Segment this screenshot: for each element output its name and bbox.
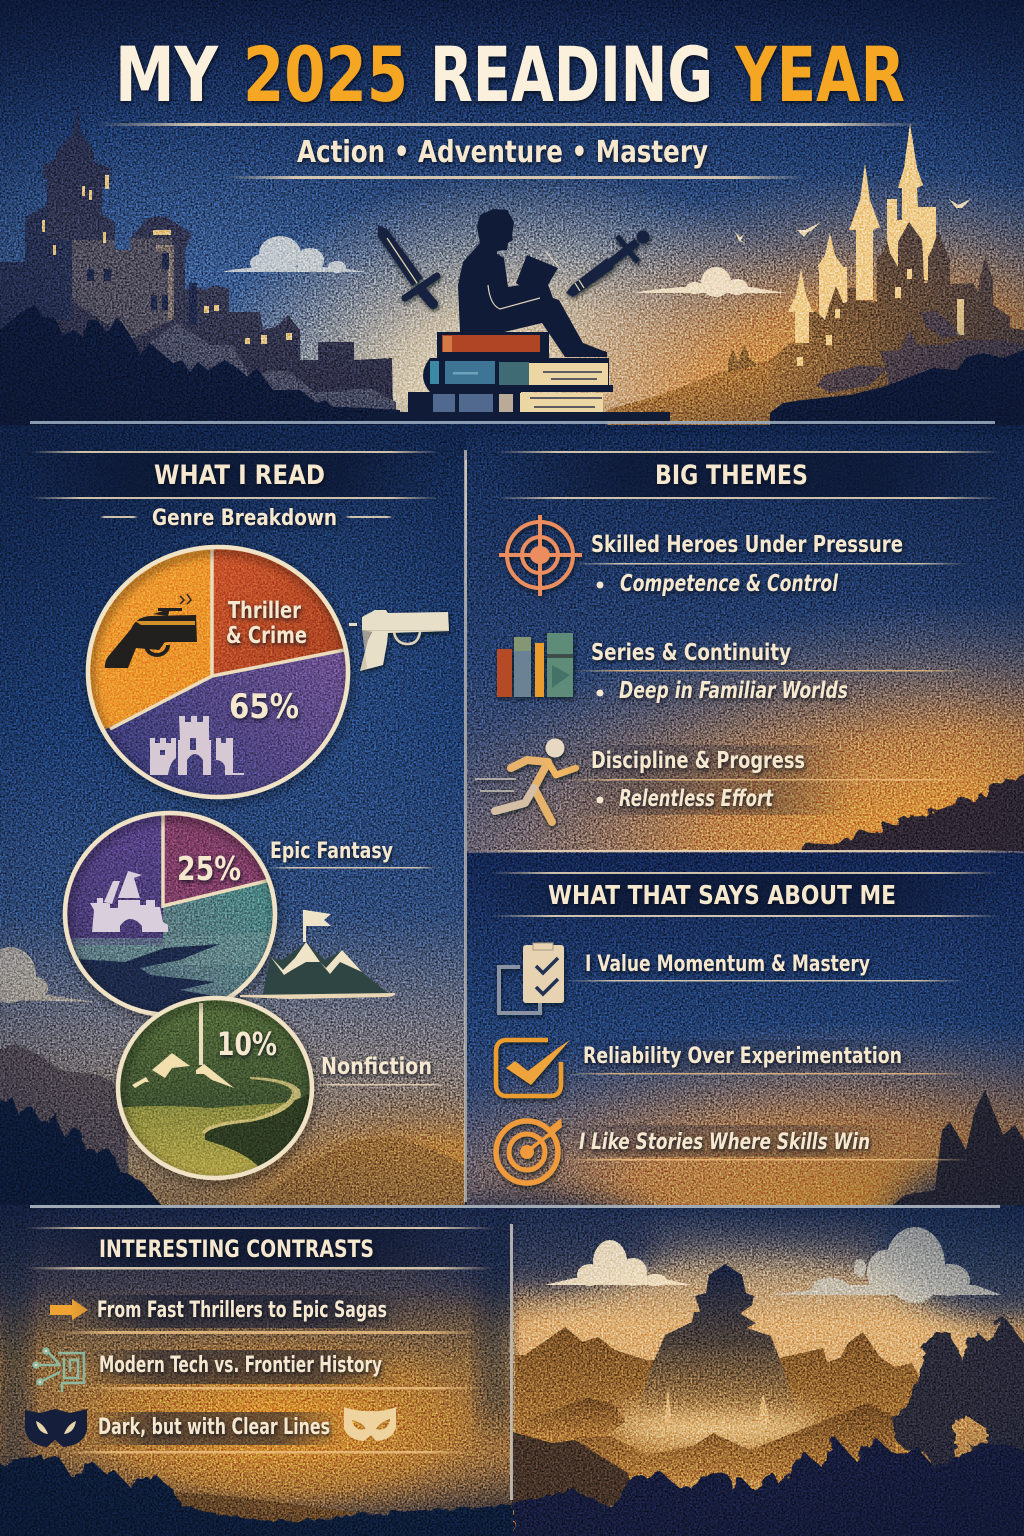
statement: skills win: I Like Stories Where Skills Win — [579, 1130, 870, 1155]
subtitle with rules — [95, 123, 925, 179]
statement: reliability — [565, 1040, 970, 1074]
title: YEAR — [734, 30, 905, 119]
heading: big themes — [490, 451, 1010, 499]
right mound and castle — [607, 123, 1024, 425]
icon: checkbox — [496, 1040, 570, 1096]
title: 2025 — [243, 30, 408, 119]
panel: what I read — [20, 451, 450, 1185]
heading: big themes: BIG THEMES — [655, 460, 808, 491]
icon: handgun — [349, 610, 449, 671]
icon: dark mask — [25, 1409, 87, 1447]
label: nonfiction: Nonfiction — [321, 1054, 432, 1080]
label: thriller and crime — [226, 598, 307, 649]
title: MY — [115, 30, 219, 119]
heading: interesting contrasts: INTERESTING CONTRASTS — [99, 1235, 374, 1263]
icon: castle — [150, 716, 244, 775]
reading figure — [458, 209, 607, 357]
panel: interesting contrasts — [20, 1227, 495, 1454]
icon: mountain with flag — [240, 910, 395, 999]
icon: arrow — [50, 1299, 88, 1320]
heading: what that says about me — [480, 872, 1010, 917]
left foreground: bottom treeline — [0, 1457, 512, 1536]
left cloud — [222, 236, 366, 273]
pie chart: 25% epic fantasy — [60, 805, 280, 1020]
icon: snow peaks — [132, 1053, 234, 1088]
theme: series and continuity: Deep in Familiar Worlds — [619, 678, 848, 704]
subtitle with rules: Action • Adventure • Mastery — [297, 135, 708, 170]
statement: reliability: Reliability Over Experimentation — [583, 1044, 902, 1069]
contrast: modern tech — [80, 1350, 485, 1390]
theme: skilled heroes: Competence & Control — [620, 571, 839, 597]
right clouds — [544, 1227, 1002, 1303]
left background art: clouds, mountains and trees — [0, 947, 465, 1215]
birds — [735, 199, 971, 243]
theme: series and continuity — [572, 640, 972, 704]
icon: circuit tech — [33, 1348, 84, 1392]
book stack — [370, 332, 670, 421]
icon: runner — [475, 738, 576, 822]
icon: sword right — [566, 230, 650, 297]
label: epic fantasy: Epic Fantasy — [270, 839, 393, 864]
label: thriller and crime: & Crime — [226, 623, 307, 649]
right background art: treelines — [796, 768, 1024, 1215]
icon: sword left — [378, 225, 437, 304]
theme: discipline and progress: Discipline & Progress — [591, 748, 805, 774]
icon: light mask — [344, 1407, 396, 1441]
icon: old pistol — [105, 594, 197, 668]
heading: what that says about me: WHAT THAT SAYS ABOUT ME — [548, 881, 896, 911]
right trees — [892, 1318, 1024, 1490]
theme: discipline and progress — [565, 745, 975, 815]
label: thriller and crime: Thriller — [228, 598, 302, 624]
heading: interesting contrasts — [20, 1227, 495, 1270]
title: READING — [430, 30, 713, 119]
value 65%: 65% — [229, 687, 299, 727]
statement: skills win — [560, 1125, 970, 1160]
contrast: dark but clear: Dark, but with Clear Lines — [98, 1415, 330, 1440]
panel: what that says about me — [480, 872, 1010, 1183]
contrast: modern tech: Modern Tech vs. Frontier History — [99, 1353, 382, 1378]
left castle silhouette — [0, 98, 396, 420]
contrast: dark but clear — [60, 1412, 475, 1454]
detective silhouette — [635, 1264, 800, 1425]
right cloud — [634, 267, 786, 297]
vertical divider — [464, 450, 467, 1202]
foreground treeline — [513, 1437, 1024, 1536]
contrast: fast thrillers — [55, 1295, 480, 1334]
value 10%: 10% — [217, 1025, 277, 1063]
contrast: fast thrillers: From Fast Thrillers to Epic Sagas — [97, 1298, 387, 1323]
left foreground hill — [513, 1432, 636, 1508]
statement: momentum and mastery: I Value Momentum & Mastery — [585, 952, 870, 977]
pie chart: 65% thriller and crime — [80, 540, 360, 810]
pie chart: 10% nonfiction — [115, 995, 320, 1185]
icon: fairy castle — [90, 871, 168, 932]
illustration: detective landscape — [513, 1227, 1024, 1536]
icon: book spines — [497, 633, 573, 697]
title — [115, 30, 905, 119]
icon: clipboard — [499, 943, 564, 1013]
icon: crosshair — [499, 515, 582, 596]
reader illustration — [370, 209, 670, 421]
theme: skilled heroes: Skilled Heroes Under Pressure — [591, 532, 903, 558]
left treeline silhouette — [0, 305, 400, 425]
panel: big themes — [475, 451, 1010, 822]
value 25%: 25% — [177, 849, 241, 888]
icon: bullseye — [496, 1118, 562, 1183]
heading: what I read — [20, 451, 450, 499]
theme: series and continuity: Series & Continuity — [591, 640, 791, 666]
mountains — [515, 1327, 935, 1480]
theme: discipline and progress: Relentless Effort — [619, 786, 774, 812]
theme: skilled heroes — [572, 532, 967, 597]
heading: what I read: WHAT I READ — [154, 460, 325, 491]
subheading: genre breakdown: Genre Breakdown — [152, 506, 337, 531]
